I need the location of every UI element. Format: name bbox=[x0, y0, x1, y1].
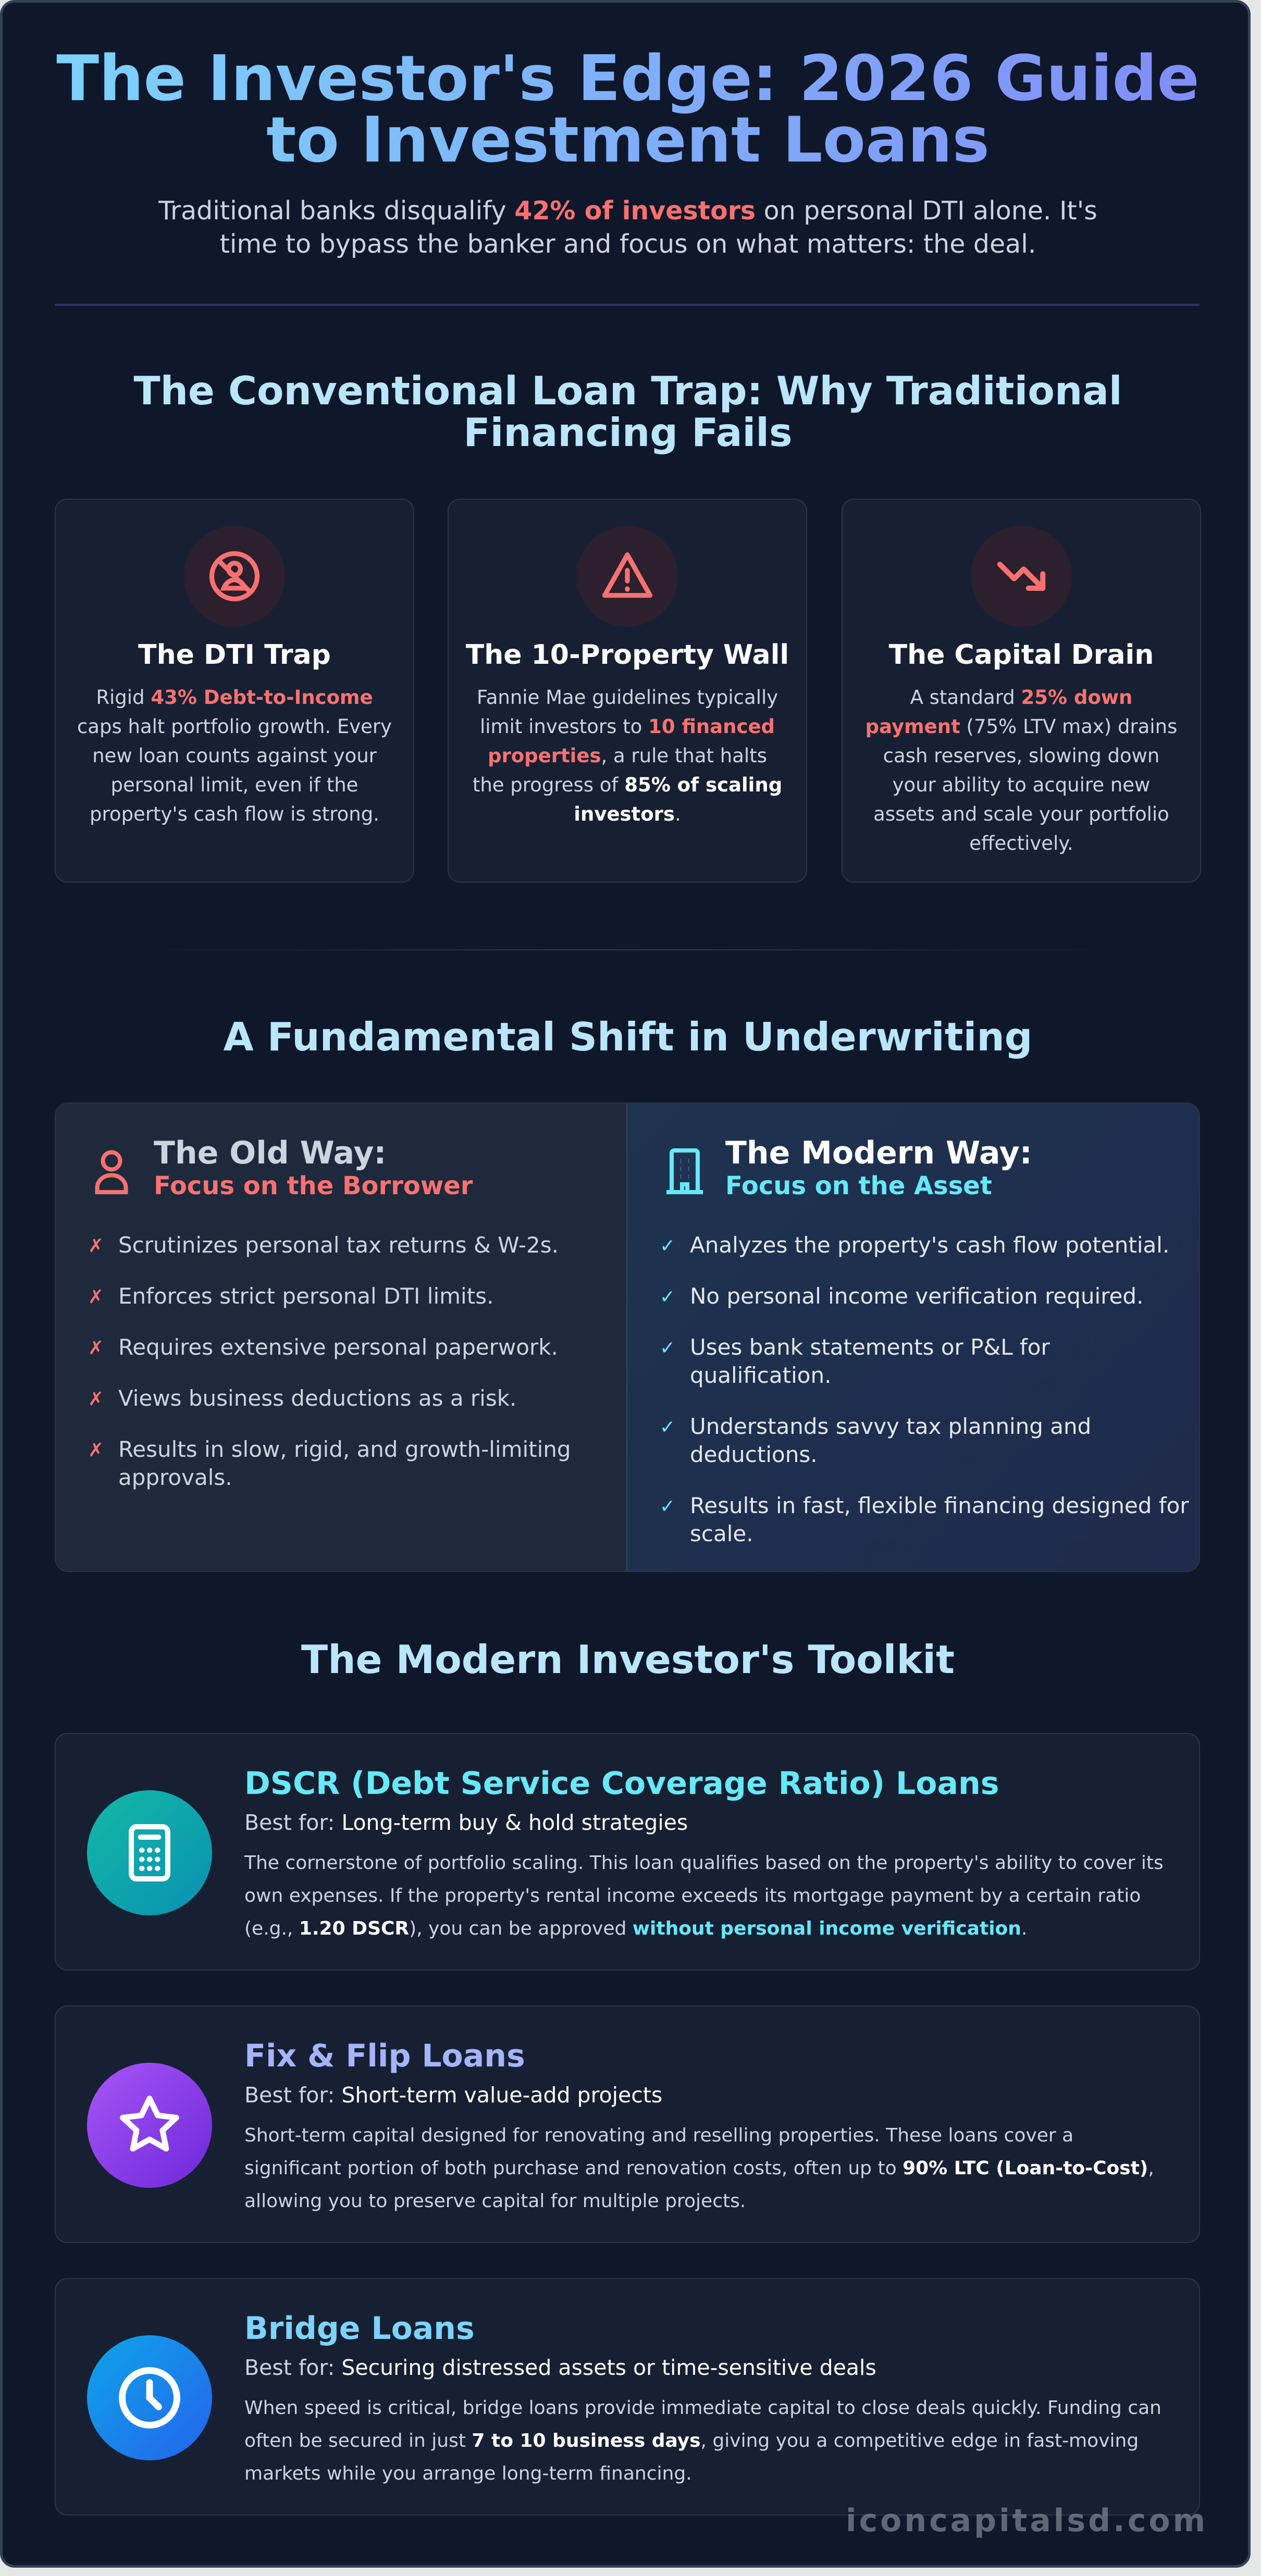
panel: DTI trap bbox=[55, 499, 414, 883]
icon: trending down bbox=[971, 526, 1072, 627]
list: modern way: Understands savvy tax planning and deductions. bbox=[690, 1414, 1091, 1467]
icon: calculator bbox=[87, 1790, 212, 1915]
icon: clock bbox=[87, 2335, 212, 2460]
list: modern way: No personal income verification required. bbox=[690, 1283, 1143, 1309]
panel: 10-property wall bbox=[448, 499, 807, 883]
panel: capital drain: The Capital Drain bbox=[889, 639, 1154, 671]
heading: fundamental shift: A Fundamental Shift in Underwriting bbox=[224, 1014, 1032, 1060]
icon: no-person bbox=[184, 526, 285, 627]
list: old way: Requires extensive personal paperwork. bbox=[118, 1334, 558, 1360]
subtitle: Traditional banks disqualify 42% of investors on personal DTI alone. It's time to bypass the banker and focus on what matters: the deal. bbox=[158, 196, 1097, 259]
title: The Investor's Edge: 2026 Guide to Investment Loans bbox=[56, 43, 1200, 177]
panel: fix & flip bbox=[55, 2005, 1200, 2243]
panel: fix & flip: Fix & Flip Loans bbox=[244, 2038, 525, 2074]
list: old way: ✗ bbox=[88, 1440, 104, 1461]
column: old way: Focus on the Borrower bbox=[154, 1171, 473, 1200]
list: modern way bbox=[660, 1232, 1189, 1546]
panel: capital drain bbox=[842, 499, 1201, 883]
list: modern way: ✓ bbox=[660, 1286, 675, 1308]
list: old way: Scrutinizes personal tax returns & W-2s. bbox=[118, 1232, 559, 1258]
list: modern way: ✓ bbox=[660, 1417, 675, 1438]
text: 10-property wall: Fannie Mae guidelines typically limit investors to 10 financed properties, a rule that halts the progress of 85% of scaling investors. bbox=[473, 686, 782, 825]
list: old way: ✗ bbox=[88, 1286, 104, 1308]
panel: fix & flip: Best for: Short-term value-add projects bbox=[244, 2083, 662, 2108]
panel: bridge loans: When speed is critical, bridge loans provide immediate capital to close deals quickly. Funding can often be secured in just 7 to 10 business days, giving you a competitive edge in fast-moving markets while you arrange long-term financing. bbox=[244, 2397, 1161, 2484]
panel: DSCR loans: DSCR (Debt Service Coverage Ratio) Loans bbox=[244, 1765, 999, 1802]
panel: DSCR loans: The cornerstone of portfolio scaling. This loan qualifies based on the property's ability to cover its own expenses. If the property's rental income exceeds its mortgage payment by a certain ratio (e.g., 1.20 DSCR), you can be approved without personal income verification. bbox=[244, 1852, 1164, 1939]
column: modern way: The Modern Way: bbox=[725, 1135, 1032, 1171]
list: modern way: Uses bank statements or P&L for bbox=[690, 1334, 1050, 1360]
list: old way bbox=[88, 1232, 571, 1490]
list: old way: ✗ bbox=[88, 1235, 104, 1257]
panel: DTI trap: The DTI Trap bbox=[138, 639, 331, 671]
watermark: iconcapitalsd.com bbox=[846, 2503, 1208, 2539]
text: DTI trap: Rigid 43% Debt-to-Income caps halt portfolio growth. Every new loan counts against your personal limit, even if the property's cash flow is strong. bbox=[77, 686, 392, 825]
column: modern way bbox=[627, 1104, 1201, 1571]
icon: star bbox=[87, 2063, 212, 2188]
list: modern way: ✓ bbox=[660, 1337, 675, 1359]
list: modern way: ✓ bbox=[660, 1235, 675, 1257]
panel: fix & flip: Short-term capital designed for renovating and reselling properties. These loans cover a significant portion of both purchase and renovation costs, often up to 90% LTC (Loan-to-Cost), allowing you to preserve capital for multiple projects. bbox=[244, 2125, 1154, 2212]
text: capital drain: A standard 25% down payment (75% LTV max) drains cash reserves, slowing down your ability to acquire new assets and scale your portfolio effectively. bbox=[866, 686, 1177, 854]
icon: warning bbox=[577, 526, 678, 627]
panel: bridge loans: Bridge Loans bbox=[244, 2310, 475, 2347]
list: old way: ✗ bbox=[88, 1337, 104, 1359]
list: old way: Enforces strict personal DTI limits. bbox=[118, 1283, 493, 1309]
panel: 10-property wall: The 10-Property Wall bbox=[466, 639, 789, 671]
list: modern way: qualification. bbox=[690, 1363, 831, 1388]
heading: conventional loan trap: The Conventional Loan Trap: Why Traditional Financing Fails bbox=[133, 368, 1122, 455]
panel: bridge loans bbox=[55, 2278, 1200, 2516]
list: old way: ✗ bbox=[88, 1389, 104, 1410]
list: modern way: Analyzes the property's cash flow potential. bbox=[690, 1232, 1169, 1258]
panel: comparison bbox=[55, 1103, 1200, 1572]
list: old way: Views business deductions as a risk. bbox=[118, 1385, 516, 1411]
panel: DSCR loans: Best for: Long-term buy & hold strategies bbox=[244, 1810, 688, 1835]
list: old way: Results in slow, rigid, and growth-limiting approvals. bbox=[118, 1436, 571, 1490]
column: modern way: Focus on the Asset bbox=[725, 1171, 992, 1200]
icon: building bbox=[666, 1148, 703, 1194]
list: modern way: ✓ bbox=[660, 1496, 675, 1517]
column: old way bbox=[56, 1104, 627, 1571]
panel: bridge loans: Best for: Securing distressed assets or time-sensitive deals bbox=[244, 2355, 876, 2380]
heading: toolkit: The Modern Investor's Toolkit bbox=[301, 1637, 955, 1682]
list: modern way: Results in fast, flexible financing designed for scale. bbox=[690, 1493, 1189, 1546]
column: old way: The Old Way: bbox=[154, 1135, 386, 1171]
panel: DSCR loans bbox=[55, 1733, 1200, 1971]
icon: person bbox=[95, 1150, 128, 1194]
